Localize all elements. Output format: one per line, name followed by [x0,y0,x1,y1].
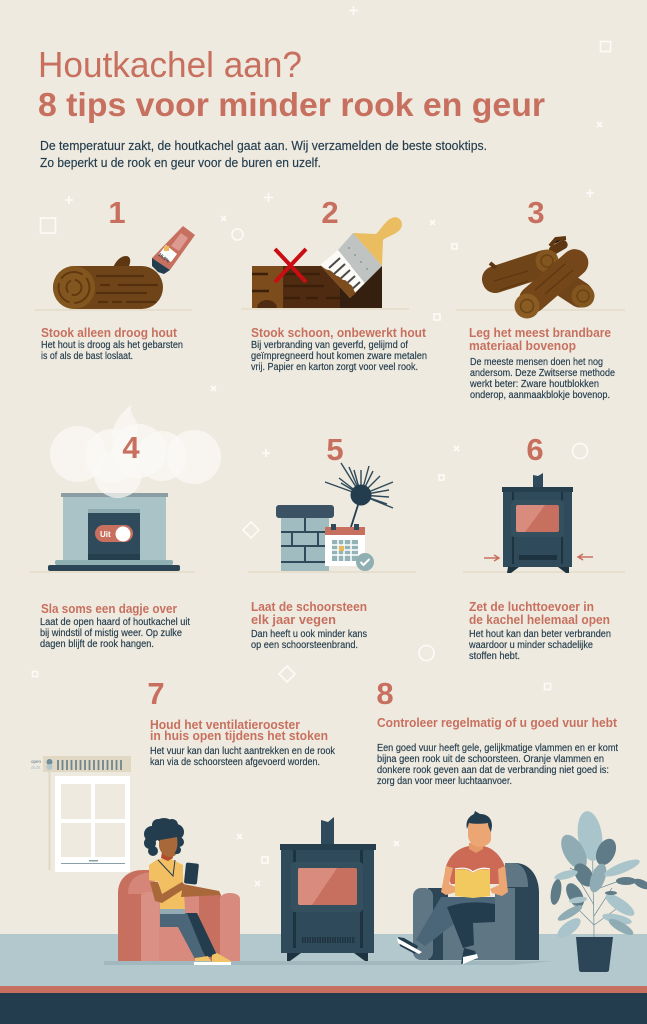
tip 1: 1 [108,195,126,230]
tip 6 [463,432,625,662]
icon: fireplace with smoke and switch [48,405,221,571]
text block: onderop, aanmaakblokje bovenop. [470,390,610,401]
text block: Het hout is droog als het gebarsten [41,340,183,351]
text block: Laat de open haard of houtkachel uit [40,617,190,628]
intro text [40,139,487,170]
heading [150,718,328,743]
armchair [505,863,539,960]
text block [468,629,611,662]
text block [377,743,618,787]
intro text: De temperatuur zakt, de houtkachel gaat aan. Wij verzamelden de beste stooktips. [40,139,487,153]
tip 4 [30,405,221,650]
text block [41,340,183,362]
tip 2: 2 [321,195,339,230]
text block: geïmpregneerd hout komen zware metalen [251,351,427,362]
tip 8: 8 [376,676,394,711]
heading: Houd het ventilatierooster [150,718,300,732]
icon: painted wood and brush [252,217,402,308]
title [38,44,545,123]
title: 8 tips voor minder rook en geur [38,86,545,123]
text block: Het vuur kan dan lucht aantrekken en de rook [150,746,335,757]
window with ventilation grille: dicht [31,765,41,770]
tip 1 [35,195,195,362]
window with ventilation grille: open [31,759,42,764]
man reading in armchair [397,811,539,964]
heading: Zet de luchttoevoer in [469,600,594,614]
heading: Sla soms een dagje over [41,602,177,616]
text block [469,357,615,401]
window with ventilation grille [31,756,131,872]
text block [150,746,335,768]
large wood stove [280,817,376,961]
text block: waardoor u minder schadelijke [468,640,594,651]
person [183,913,217,958]
heading: Leg het meest brandbare [469,326,611,340]
armchair [118,870,155,961]
text block: dagen blijft de rook hangen. [40,639,154,650]
title: Houtkachel aan? [38,44,302,85]
tip 7: 7 [147,676,165,711]
heading: in huis open tijdens het stoken [150,729,328,743]
text block [40,617,190,650]
text block: Het hout kan dan beter verbranden [469,629,611,640]
tip 6: 6 [526,432,544,467]
icon: stove with air arrows [484,473,593,573]
heading: materiaal bovenop [469,339,576,353]
text block: donkere rook geven aan dat de verbranding niet goed is: [377,765,609,776]
text block: vrij. Papier en karton zorgt voor veel rook. [251,362,418,373]
icon: log with moisture meter: 15.5% [157,252,171,264]
icon: fireplace with smoke and switch: Uit [100,530,111,539]
room floor [0,934,647,1024]
text block: andersom. Deze Zwitserse methode [470,368,615,379]
text block: Dan heeft u ook minder kans [251,629,367,640]
heading: Laat de schoorsteen [251,600,367,614]
potted plant [549,810,647,972]
icon: stacked logs [479,238,598,318]
tip 5: 5 [326,432,344,467]
text block: bijna geen rook uit de schoorsteen. Oranje vlammen en [377,754,604,765]
text block: kan via de schoorsteen afgevoerd worden. [150,757,320,768]
icon: log with moisture meter [53,226,195,309]
heading: Stook alleen droog hout [41,326,178,340]
woman in armchair [118,818,240,965]
heading [251,600,367,627]
heading: elk jaar vegen [251,613,336,627]
text block: is of als de bast loslaat. [41,351,133,362]
text block: op een schoorsteenbrand. [251,640,358,651]
tip 7 [147,676,335,768]
tip 3: 3 [527,195,545,230]
heading [469,600,610,627]
tip 5 [248,432,416,651]
tip 2 [241,195,427,373]
heading: de kachel helemaal open [469,613,610,627]
text block [251,629,367,651]
tip 4: 4 [122,430,140,465]
heading: Controleer regelmatig of u goed vuur hebt [377,716,618,730]
icon: chimney, sweeping brush and calendar [276,463,393,571]
person [416,897,495,946]
text block: bij windstil of mistig weer. Op zulke [40,628,183,639]
text block: stoffen hebt. [469,651,520,662]
text block: Een goed vuur heeft gele, gelijkmatige vlammen en er komt [377,743,618,754]
text block: De meeste mensen doen het nog [470,357,603,368]
heading: Stook schoon, onbewerkt hout [251,326,427,340]
heading [469,326,611,353]
text block: werkt beter: Zware houtblokken [469,379,599,390]
text block: zorg dan voor meer luchtaanvoer. [377,776,512,787]
tip 3 [456,195,625,401]
tip 8 [376,676,618,787]
text block: Bij verbranding van geverfd, gelijmd of [251,340,408,351]
text block [251,340,427,373]
intro text: Zo beperkt u de rook en geur voor de buren en uzelf. [40,156,321,170]
